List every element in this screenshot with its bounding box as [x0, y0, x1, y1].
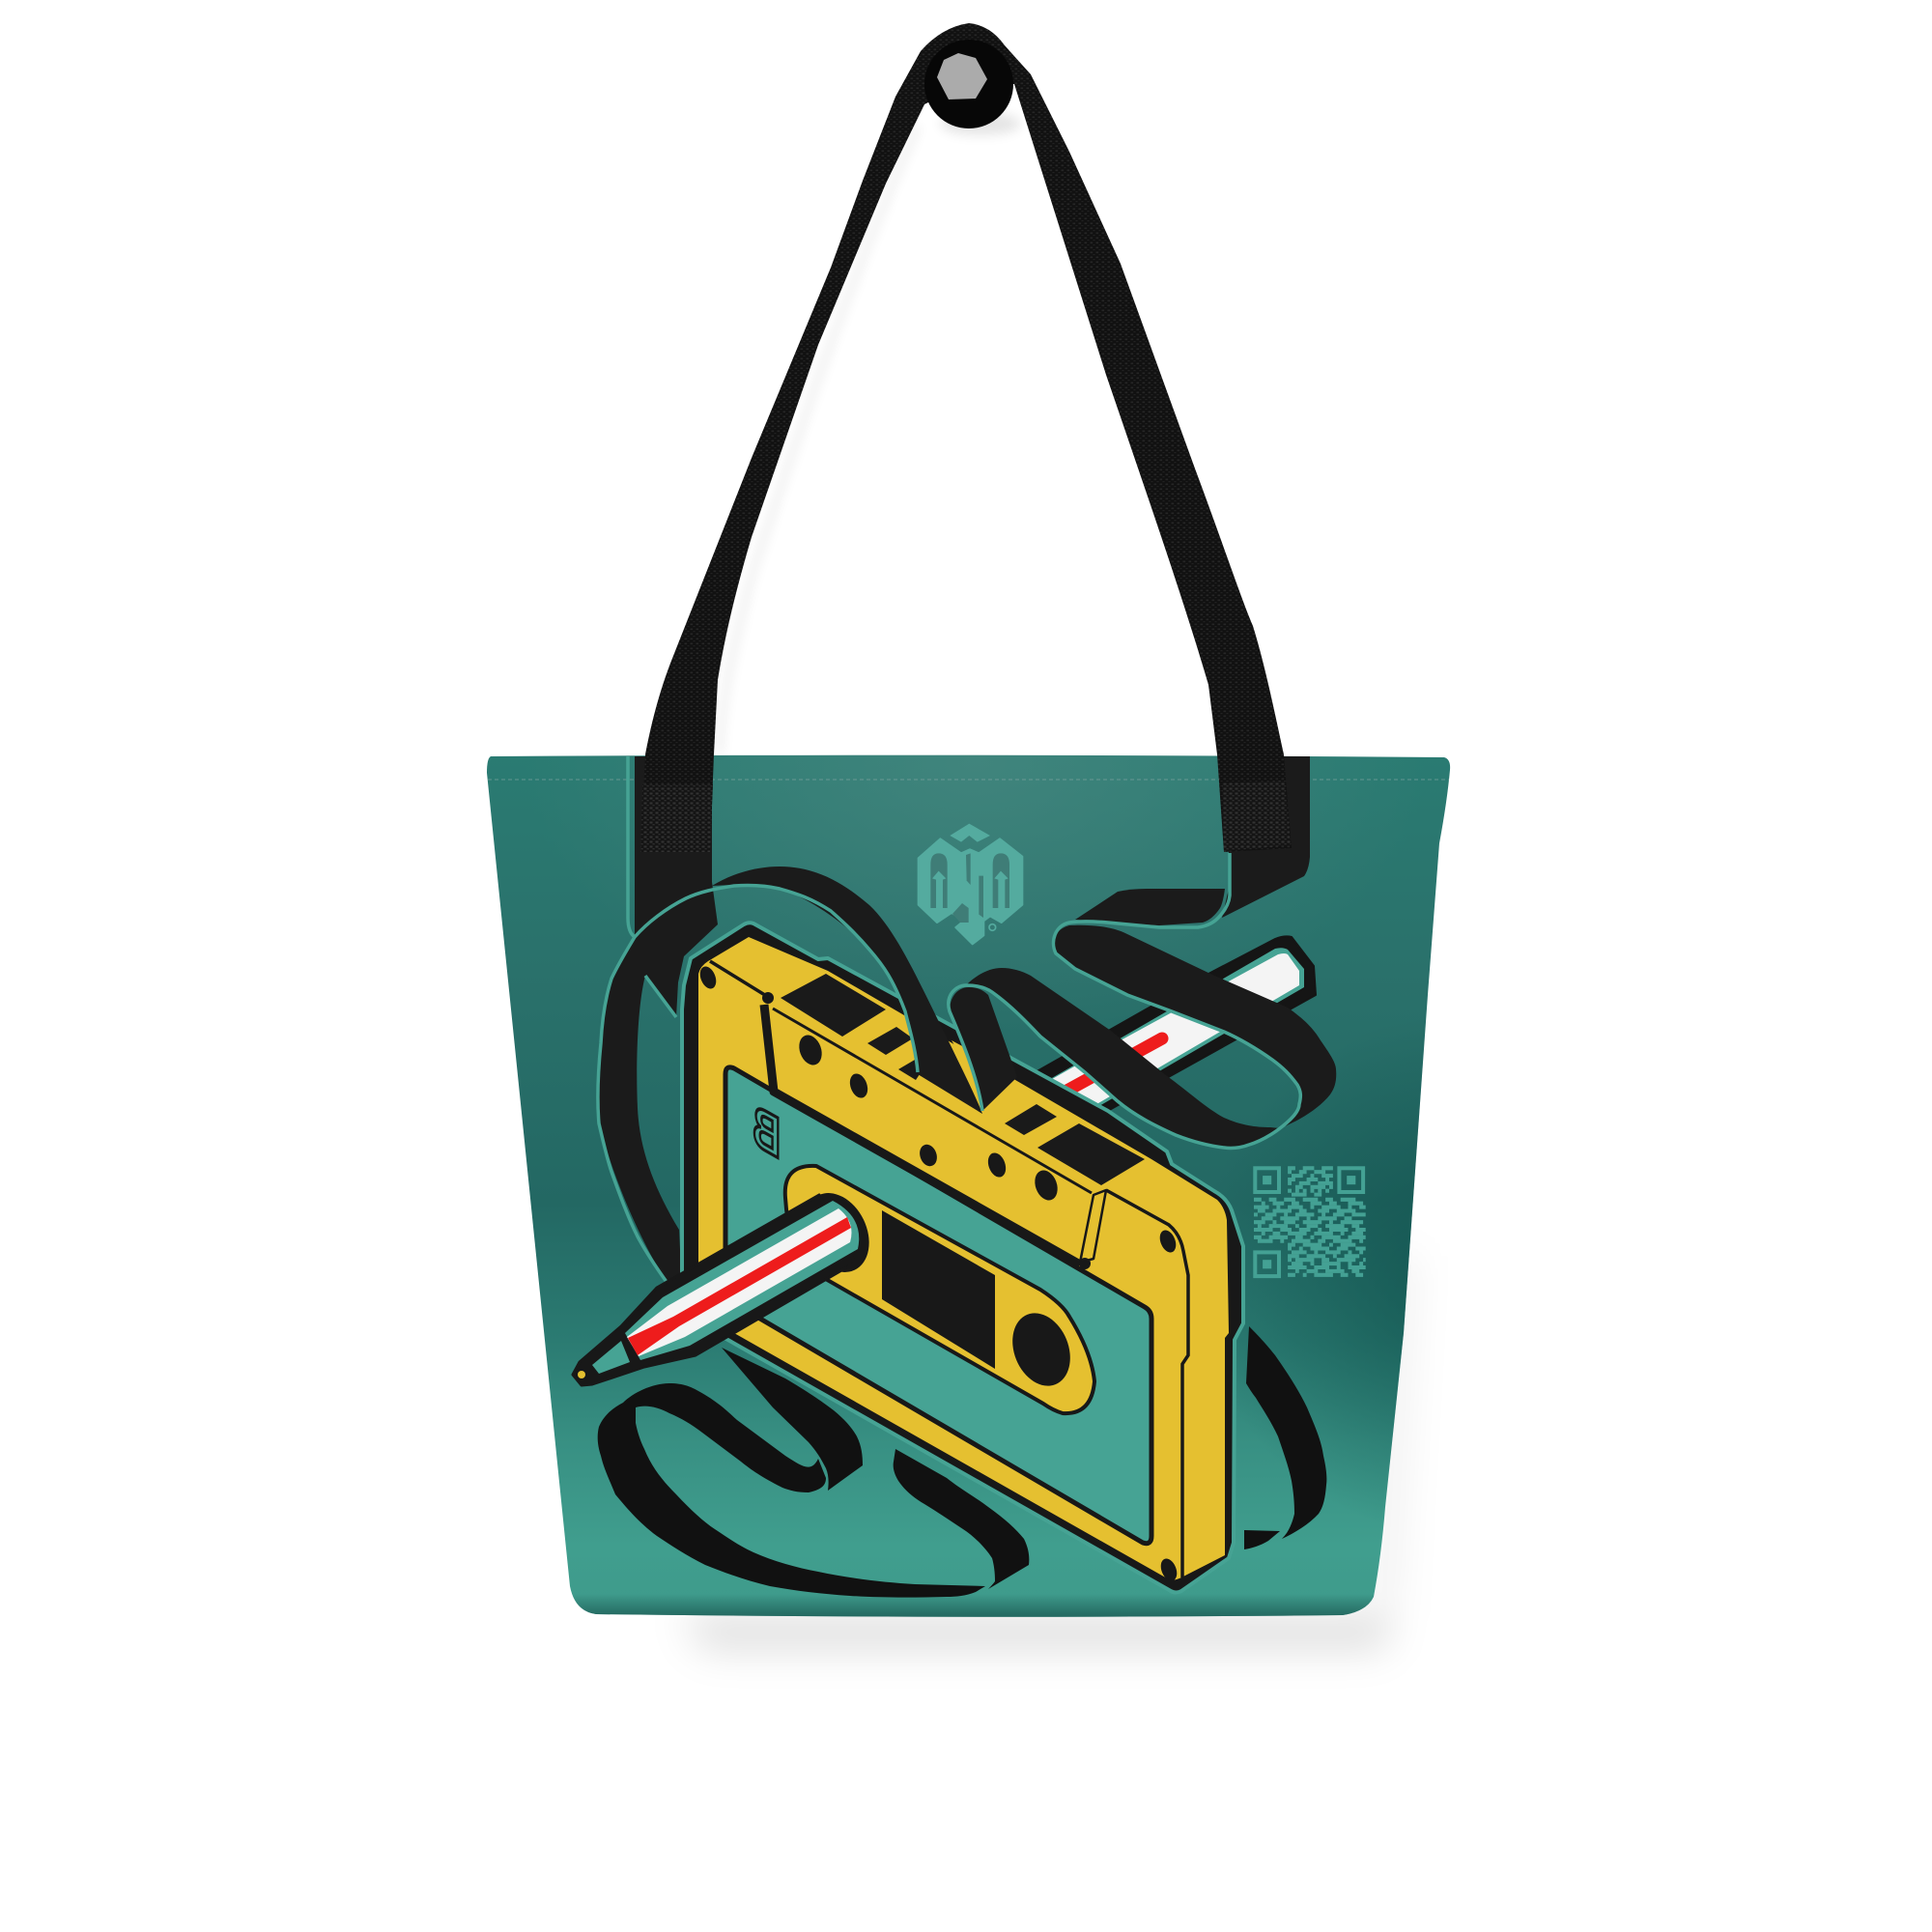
strap stitched ends on bag — [640, 781, 1291, 852]
upper tape ribbons over cassette — [598, 756, 1336, 1282]
cassette small yellow sliver — [952, 1040, 969, 1056]
tape: arch from left strap into cassette — [712, 867, 982, 1114]
left strap — [640, 23, 969, 852]
tape: lower-right band — [1246, 1326, 1326, 1539]
cassette label window — [785, 1166, 1094, 1413]
cassette body outline — [682, 923, 1243, 1592]
cassette — [682, 923, 1243, 1592]
cassette screws — [697, 964, 1179, 1583]
QR code — [1254, 1168, 1366, 1276]
tape: upper band of right loop — [1054, 925, 1336, 1128]
printed tape: left vertical and left crescent — [598, 756, 718, 1290]
side letter B: B — [753, 1093, 781, 1172]
tape: lower curl — [894, 1449, 1029, 1589]
tape: lower band of right loop — [966, 968, 1280, 1148]
cassette teal face — [725, 1067, 1151, 1544]
pencil: lower section with tip — [573, 1195, 859, 1385]
cassette yellow shell — [698, 937, 1229, 1580]
tape: teal outlines of ribbons — [949, 853, 1300, 1148]
strap shadow — [720, 112, 1021, 753]
tape: loop leg into cassette — [950, 987, 1017, 1111]
tape: ring teal line — [598, 885, 918, 1282]
tape: right vertical ribbon — [1222, 756, 1310, 918]
hanging peg — [924, 40, 1013, 128]
pencil cone tip — [592, 1341, 630, 1374]
pencil: upper section behind tape — [1034, 936, 1316, 1136]
lower tape loops — [598, 1326, 1326, 1598]
tape: top-right ribbon piece — [1075, 889, 1225, 925]
brand logo — [919, 824, 1022, 944]
cassette flap with holes — [710, 961, 1106, 1269]
bag body — [473, 744, 1468, 1623]
tape: lower-middle band — [722, 1348, 863, 1491]
tape: large lower-left loop — [598, 1383, 985, 1598]
right strap — [969, 23, 1292, 852]
tape: lower-right stub — [1244, 1530, 1280, 1549]
cassette top black windows — [781, 974, 1145, 1185]
cassette side edge line — [1106, 1190, 1188, 1577]
ground shadow under bag — [681, 1256, 1415, 1650]
tote bag product illustration — [487, 23, 1451, 1662]
